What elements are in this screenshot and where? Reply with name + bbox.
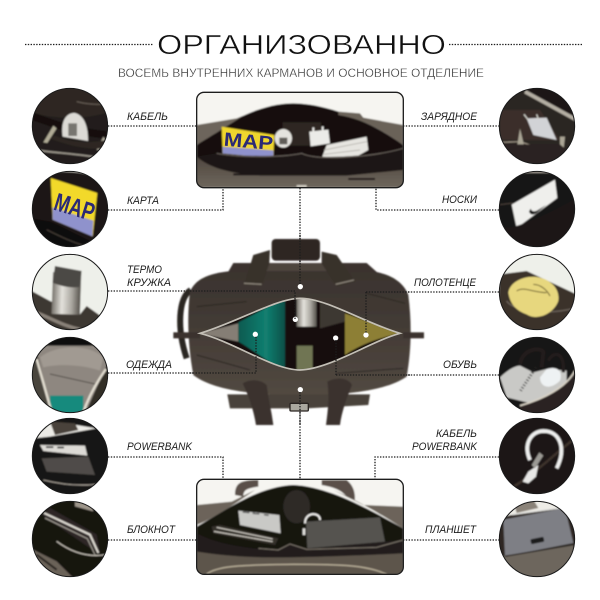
map card: [222, 127, 274, 158]
charger: [309, 130, 330, 146]
circle: charger: [497, 85, 577, 165]
panel: top pocket photo: [197, 92, 403, 188]
label: towel: ПОЛОТЕНЦЕ: [414, 277, 477, 289]
label: tablet: ПЛАНШЕТ: [425, 524, 477, 536]
label: powerbank cable: КАБЕЛЬ: [436, 428, 477, 440]
socks: [322, 137, 368, 158]
bag flap left: [197, 116, 243, 145]
circle: shoes: [497, 334, 577, 414]
circle: socks: [497, 168, 577, 248]
circle: tablet: [497, 498, 577, 578]
top handle: [272, 239, 320, 261]
subtitle: ВОСЕМЬ ВНУТРЕННИХ КАРМАНОВ И ОСНОВНОЕ ОТДЕЛЕНИЕ: [118, 68, 484, 80]
label: clothes: ОДЕЖДА: [126, 359, 172, 371]
circle: powerbank cable: [497, 415, 577, 495]
label: powerbank: POWERBANK: [127, 441, 193, 453]
circle: towel: [498, 254, 576, 330]
front pocket: [227, 394, 370, 408]
bag flap right: [338, 112, 403, 145]
label: shoes: ОБУВЬ: [443, 359, 477, 371]
label: cable: КАБЕЛЬ: [127, 111, 168, 123]
labels right: [412, 111, 478, 536]
bag flap left: [197, 490, 255, 525]
top pocket band: [228, 263, 378, 278]
label: map: КАРТА: [127, 195, 159, 207]
cable roll: [275, 129, 292, 148]
front pocket: [198, 534, 402, 556]
label: charger: ЗАРЯДНОЕ: [421, 111, 478, 123]
label: socks: НОСКИ: [442, 194, 477, 206]
circle: notebook: [30, 498, 110, 578]
title: ОРГАНИЗОВАННО: [157, 29, 446, 60]
panel: bottom pocket photo: [197, 479, 403, 574]
label: thermo mug: [127, 264, 171, 289]
powerbank: [238, 511, 281, 533]
zip pull: [290, 403, 308, 411]
leader dots: [253, 284, 369, 392]
label: powerbank cable: [412, 428, 478, 453]
label: notebook: БЛОКНОТ: [127, 524, 176, 536]
leader lines: [108, 126, 499, 540]
pocket interior: [197, 102, 403, 170]
side strap: [180, 290, 191, 358]
circle: clothes: [30, 334, 110, 414]
label: thermo mug: КРУЖКА: [127, 277, 171, 289]
circle: thermo mug: [32, 254, 108, 330]
lower leather: [197, 157, 403, 188]
main bag photo: [173, 239, 424, 425]
label: thermo mug: ТЕРМО: [127, 264, 162, 276]
bag body: [188, 271, 411, 396]
handles behind: [235, 480, 258, 497]
front straps: [243, 380, 273, 425]
buckles: [173, 332, 200, 338]
labels left: [126, 111, 193, 536]
circle: map: [30, 168, 110, 248]
handle straps: [244, 250, 270, 286]
circle: cable: [30, 85, 110, 165]
circle: powerbank: [30, 415, 110, 495]
lower leather: [197, 552, 403, 574]
map card title: MAP: [51, 188, 98, 227]
opening: [203, 297, 397, 370]
tablet: [306, 517, 385, 548]
pocket interior: [197, 484, 403, 553]
notebook: [212, 525, 278, 545]
map text: MAP: [223, 130, 274, 155]
leader lines over bag: [190, 235, 410, 425]
label: powerbank cable: POWERBANK: [412, 441, 478, 453]
cable: [305, 514, 320, 523]
front pocket: [198, 150, 402, 174]
zipper edge: [200, 298, 400, 370]
bag flap right: [333, 490, 403, 528]
